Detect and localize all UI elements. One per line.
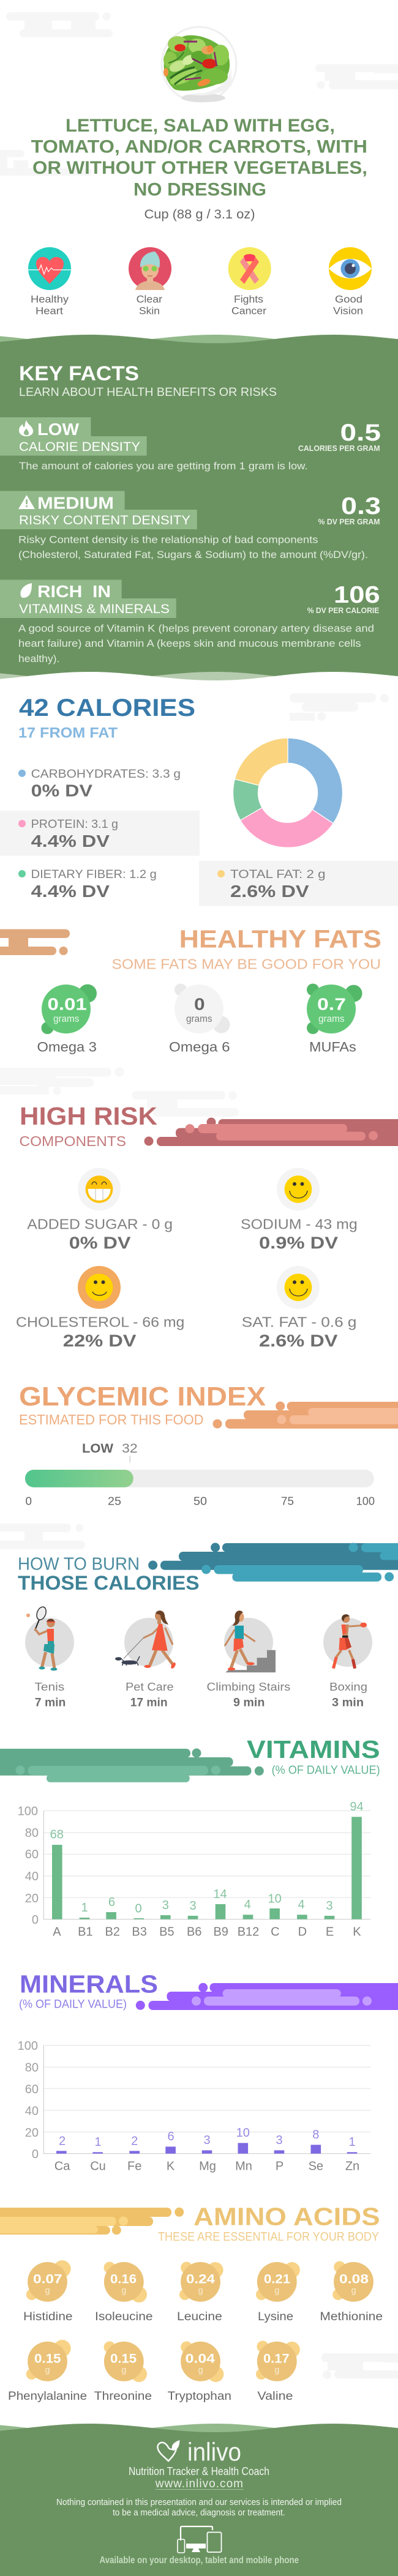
amino: methionine: Methionine bbox=[320, 2310, 383, 2323]
activity: pet care: 17 min bbox=[130, 1696, 168, 1710]
amino: isoleucine bbox=[95, 2261, 153, 2323]
fact: rich in vitamins and minerals: % DV PER CALORIE bbox=[307, 606, 379, 615]
activity: climbing stairs bbox=[207, 1610, 290, 1710]
glycemic bar: 0 bbox=[26, 1495, 32, 1507]
calories heading: 17 FROM FAT bbox=[18, 725, 118, 742]
vitamins bar chart: 1 bbox=[81, 1901, 88, 1915]
panel: key facts bbox=[0, 335, 398, 688]
title: NO DRESSING bbox=[133, 180, 266, 199]
amino: lysine: 0.21 bbox=[264, 2272, 290, 2287]
vitamins bar chart: 20 bbox=[25, 1892, 39, 1905]
vitamins bar chart: 94 bbox=[350, 1800, 364, 1814]
vitamins bar chart: 14 bbox=[213, 1888, 227, 1901]
minerals bar chart: P bbox=[276, 2160, 283, 2173]
vitamins bar chart: 60 bbox=[25, 1848, 39, 1861]
vitamins bar chart: A bbox=[53, 1925, 61, 1938]
amino acids heading: THESE ARE ESSENTIAL FOR YOUR BODY bbox=[158, 2230, 379, 2244]
minerals bar chart: 0 bbox=[32, 2148, 39, 2161]
vitamins bar chart: 4 bbox=[244, 1898, 251, 1912]
minerals heading: MINERALS bbox=[20, 1970, 158, 1998]
vitamins bar chart: B1 bbox=[78, 1925, 93, 1938]
healthy fats header decoration bbox=[0, 929, 70, 955]
key facts heading: KEY FACTS bbox=[19, 362, 139, 384]
fact: rich in vitamins and minerals: RICH IN bbox=[37, 582, 111, 601]
fat: omega 6 bbox=[169, 984, 230, 1055]
high risk heading: HIGH RISK bbox=[20, 1102, 157, 1130]
minerals bar chart: 6 bbox=[167, 2130, 175, 2143]
vitamins bar chart: 100 bbox=[18, 1805, 38, 1818]
fact: low calorie density bbox=[0, 417, 381, 472]
protein: PROTEIN: 3.1 g bbox=[31, 817, 118, 831]
amino: methionine: 0.08 bbox=[339, 2272, 369, 2287]
activity: boxing bbox=[323, 1614, 372, 1710]
carbohydrates bbox=[18, 767, 181, 800]
fact: rich in vitamins and minerals: A good source of Vitamin K (helps prevent coronary artery disease and bbox=[18, 623, 374, 634]
background clouds: high risk bbox=[0, 1067, 239, 1117]
amino: lysine bbox=[256, 2262, 300, 2323]
activity: pet care: Pet Care bbox=[126, 1680, 174, 1693]
amino: leucine bbox=[177, 2261, 223, 2323]
benefit: fights cancer: Fights bbox=[234, 294, 263, 305]
glycemic index heading: GLYCEMIC INDEX bbox=[19, 1382, 266, 1412]
minerals bar chart: Se bbox=[309, 2160, 323, 2173]
vitamins bar chart: 4 bbox=[298, 1898, 305, 1912]
vitamins bar chart: B2 bbox=[105, 1925, 120, 1938]
vitamins bar chart: D bbox=[298, 1925, 307, 1938]
minerals bar chart: 40 bbox=[25, 2105, 39, 2118]
high risk heading: COMPONENTS bbox=[20, 1133, 126, 1149]
vitamins bar chart bbox=[18, 1800, 370, 1938]
minerals bar chart bbox=[18, 2039, 370, 2173]
vitamins bar chart: B12 bbox=[238, 1925, 259, 1938]
glycemic bar: 50 bbox=[193, 1495, 207, 1507]
glycemic value marker: LOW bbox=[82, 1441, 114, 1456]
benefit: good vision: Vision bbox=[333, 305, 363, 317]
fact: medium risky content density: RISKY CONTENT DENSITY bbox=[19, 513, 190, 527]
fact: medium risky content density: % DV PER GRAM bbox=[318, 518, 380, 526]
vitamins heading bbox=[247, 1735, 380, 1777]
fact: low calorie density: LOW bbox=[37, 420, 79, 439]
amino: phenylalanine: g bbox=[45, 2366, 50, 2375]
activity: tennis bbox=[25, 1606, 74, 1710]
dietary fiber: DIETARY FIBER: 1.2 g bbox=[31, 868, 157, 881]
minerals bar chart: 2 bbox=[131, 2134, 138, 2148]
minerals bar chart: Mg bbox=[199, 2160, 216, 2173]
protein bbox=[18, 817, 118, 851]
dietary fiber bbox=[18, 868, 157, 901]
minerals header decoration bbox=[136, 1983, 398, 2010]
serving size: Cup (88 g / 3.1 oz) bbox=[145, 207, 255, 221]
activity: climbing stairs: Climbing Stairs bbox=[207, 1680, 290, 1693]
fat: omega 3: 0.01 bbox=[48, 995, 87, 1014]
benefit: clear skin: Skin bbox=[139, 305, 160, 317]
fact: low calorie density: 0.5 bbox=[340, 420, 381, 446]
healthy fats heading: HEALTHY FATS bbox=[179, 925, 381, 953]
amino: tryptophan: 0.04 bbox=[186, 2351, 215, 2366]
minerals bar chart: 1 bbox=[94, 2135, 102, 2149]
vitamins bar chart: C bbox=[271, 1925, 280, 1938]
vitamins header decoration bbox=[0, 1749, 264, 1782]
amino: lysine: Lysine bbox=[258, 2310, 293, 2323]
fact: medium risky content density: (Cholesterol, Saturated Fat, Sugars & Sodium) to the amount (%DV/gr). bbox=[18, 549, 368, 560]
vitamins bar chart: 0 bbox=[32, 1913, 39, 1927]
total fat bbox=[217, 868, 326, 901]
minerals bar chart: 8 bbox=[312, 2128, 319, 2142]
risk: added sugar bbox=[27, 1168, 173, 1253]
fat: mufas bbox=[307, 984, 362, 1055]
amino: leucine: g bbox=[198, 2286, 203, 2296]
amino: valine: g bbox=[274, 2366, 279, 2375]
risk: saturated fat: 2.6% DV bbox=[259, 1331, 338, 1350]
activity: tennis: 7 min bbox=[35, 1696, 66, 1710]
fat: omega 6: grams bbox=[186, 1014, 212, 1024]
amino: threonine: 0.15 bbox=[110, 2351, 137, 2366]
risk: sodium: 0.9% DV bbox=[259, 1234, 339, 1253]
fat: omega 6: Omega 6 bbox=[169, 1040, 230, 1055]
key facts heading bbox=[19, 362, 277, 399]
dietary fiber: 4.4% DV bbox=[31, 882, 110, 901]
risk: sodium bbox=[241, 1168, 358, 1253]
amino: isoleucine: g bbox=[121, 2286, 126, 2296]
background cloud: amino acids bbox=[321, 2353, 398, 2379]
healthy fats heading bbox=[111, 925, 381, 972]
benefit: healthy heart: Heart bbox=[36, 305, 63, 317]
protein: 4.4% DV bbox=[31, 832, 110, 851]
risk: cholesterol bbox=[16, 1266, 184, 1350]
minerals heading bbox=[19, 1970, 158, 2011]
vitamins bar chart: B5 bbox=[159, 1925, 175, 1938]
amino: histidine bbox=[23, 2260, 73, 2323]
fact: medium risky content density: Risky Content density is the relationship of bad components bbox=[18, 534, 318, 545]
activity: boxing: 3 min bbox=[332, 1696, 364, 1710]
fat: mufas: 0.7 bbox=[317, 995, 346, 1014]
minerals bar chart: 100 bbox=[18, 2039, 38, 2053]
amino: phenylalanine: Phenylalanine bbox=[8, 2390, 87, 2403]
minerals bar chart: Ca bbox=[54, 2160, 70, 2173]
fact: rich in vitamins and minerals: healthy). bbox=[18, 653, 59, 664]
inlivo logo bbox=[157, 2438, 241, 2466]
fat: mufas: grams bbox=[318, 1014, 345, 1024]
key facts heading: LEARN ABOUT HEALTH BENEFITS OR RISKS bbox=[19, 385, 277, 399]
burn heading: HOW TO BURN bbox=[18, 1555, 140, 1574]
minerals heading: (% OF DAILY VALUE) bbox=[19, 1998, 127, 2011]
minerals bar chart: 3 bbox=[276, 2134, 283, 2147]
amino acids heading: AMINO ACIDS bbox=[193, 2203, 380, 2231]
amino: isoleucine: Isoleucine bbox=[95, 2310, 153, 2323]
minerals bar chart: Fe bbox=[127, 2160, 141, 2173]
fact: low calorie density: The amount of calories you are getting from 1 gram is low. bbox=[19, 461, 307, 472]
vitamins bar chart: K bbox=[353, 1925, 361, 1938]
glycemic header decoration bbox=[213, 1401, 398, 1429]
vitamins bar chart: B3 bbox=[132, 1925, 147, 1938]
activity: tennis: Tenis bbox=[34, 1680, 64, 1693]
title: LETTUCE, SALAD WITH EGG, bbox=[66, 116, 335, 136]
fat: omega 3: Omega 3 bbox=[37, 1040, 97, 1055]
vitamins bar chart: B9 bbox=[213, 1925, 228, 1938]
tagline: Nutrition Tracker & Health Coach bbox=[129, 2465, 269, 2477]
minerals bar chart: Mn bbox=[235, 2160, 252, 2173]
carbohydrates: CARBOHYDRATES: 3.3 g bbox=[31, 767, 181, 781]
amino: valine: Valine bbox=[257, 2390, 293, 2403]
minerals bar chart: 10 bbox=[236, 2126, 250, 2140]
glycemic index heading bbox=[19, 1382, 266, 1428]
total fat: TOTAL FAT: 2 g bbox=[230, 868, 326, 881]
title: TOMATO, AND/OR CARROTS, WITH bbox=[31, 137, 367, 157]
amino: histidine: g bbox=[45, 2286, 50, 2296]
amino: leucine: 0.24 bbox=[186, 2272, 215, 2287]
salad illustration bbox=[162, 27, 236, 102]
donut chart bbox=[233, 738, 342, 847]
vitamins bar chart: 6 bbox=[108, 1896, 115, 1909]
fact: low calorie density: CALORIE DENSITY bbox=[19, 440, 140, 454]
disclaimer: Nothing contained in this presentation and our services is intended or implied bbox=[56, 2497, 342, 2507]
minerals bar chart: 60 bbox=[25, 2083, 39, 2096]
fat: omega 6: 0 bbox=[194, 995, 205, 1014]
fact: rich in vitamins and minerals: heart failure) and Vitamin A (keeps skin and mucous membrane cells bbox=[18, 638, 361, 649]
minerals bar chart: Zn bbox=[345, 2160, 359, 2173]
amino: valine: 0.17 bbox=[263, 2351, 290, 2366]
fact: rich in vitamins and minerals: 106 bbox=[334, 582, 380, 608]
vitamins bar chart: E bbox=[326, 1925, 334, 1938]
fat: omega 3 bbox=[37, 985, 97, 1055]
fact: medium risky content density: MEDIUM bbox=[37, 493, 114, 513]
glycemic bar: 75 bbox=[281, 1495, 294, 1507]
benefit: healthy heart bbox=[28, 247, 71, 317]
amino: lysine: g bbox=[274, 2286, 279, 2296]
amino: tryptophan bbox=[168, 2341, 231, 2403]
glycemic bar: 25 bbox=[108, 1495, 121, 1507]
fact: rich in vitamins and minerals bbox=[0, 580, 380, 664]
benefit: fights cancer bbox=[228, 247, 271, 317]
minerals bar chart: 20 bbox=[25, 2126, 39, 2140]
background cloud: calories bbox=[290, 693, 389, 721]
fact: medium risky content density: 0.3 bbox=[341, 493, 381, 519]
minerals bar chart: 2 bbox=[59, 2134, 66, 2148]
risk: saturated fat: SAT. FAT - 0.6 g bbox=[242, 1314, 356, 1330]
benefit: healthy heart: Healthy bbox=[31, 294, 69, 305]
vitamins heading: (% OF DAILY VALUE) bbox=[272, 1764, 380, 1777]
fact: low calorie density: CALORIES PER GRAM bbox=[298, 444, 380, 453]
vitamins bar chart: 80 bbox=[25, 1826, 39, 1840]
benefit: good vision: Good bbox=[335, 294, 362, 305]
burn heading bbox=[18, 1555, 200, 1594]
healthy fats heading: SOME FATS MAY BE GOOD FOR YOU bbox=[111, 956, 381, 972]
calories heading bbox=[18, 694, 195, 742]
amino: histidine: Histidine bbox=[23, 2310, 73, 2323]
amino acids heading bbox=[158, 2203, 380, 2244]
glycemic value marker bbox=[82, 1441, 138, 1462]
risk: sodium: SODIUM - 43 mg bbox=[241, 1216, 358, 1232]
benefit: good vision bbox=[329, 247, 372, 317]
minerals bar chart: Cu bbox=[90, 2160, 106, 2173]
amino: tryptophan: Tryptophan bbox=[168, 2390, 231, 2403]
glycemic index heading: ESTIMATED FOR THIS FOOD bbox=[19, 1412, 203, 1428]
devices icon bbox=[178, 2526, 222, 2553]
fat: omega 3: grams bbox=[53, 1014, 80, 1024]
amino: methionine bbox=[320, 2261, 383, 2323]
fact: rich in vitamins and minerals: VITAMINS & MINERALS bbox=[19, 602, 170, 616]
title bbox=[31, 116, 367, 199]
availability note: Available on your desktop, tablet and mobile phone bbox=[99, 2555, 299, 2566]
amino: phenylalanine bbox=[8, 2340, 87, 2403]
website link: www.inlivo.com bbox=[155, 2477, 243, 2490]
vitamins bar chart: 3 bbox=[326, 1899, 333, 1913]
risk: saturated fat bbox=[242, 1266, 356, 1350]
minerals bar chart: 3 bbox=[203, 2134, 211, 2147]
background clouds: header bbox=[0, 12, 398, 176]
vitamins bar chart: 3 bbox=[189, 1899, 197, 1913]
amino: isoleucine: 0.16 bbox=[110, 2272, 137, 2287]
vitamins bar chart: 68 bbox=[50, 1828, 64, 1841]
vitamins heading: VITAMINS bbox=[247, 1735, 380, 1763]
amino: valine bbox=[256, 2341, 300, 2403]
fat: mufas: MUFAs bbox=[309, 1040, 356, 1055]
footer panel bbox=[0, 2424, 398, 2576]
amino: methionine: g bbox=[351, 2286, 356, 2296]
amino: threonine bbox=[94, 2341, 152, 2403]
glycemic value marker: 32 bbox=[122, 1441, 138, 1456]
minerals bar chart: 1 bbox=[348, 2135, 356, 2149]
burn heading: THOSE CALORIES bbox=[18, 1572, 200, 1594]
risk: cholesterol: CHOLESTEROL - 66 mg bbox=[16, 1314, 184, 1330]
amino: leucine: Leucine bbox=[177, 2310, 222, 2323]
calories heading: 42 CALORIES bbox=[19, 694, 195, 721]
glycemic bar: 100 bbox=[356, 1495, 375, 1507]
vitamins bar chart: 3 bbox=[162, 1899, 169, 1912]
high risk header decoration bbox=[145, 1117, 398, 1146]
amino: tryptophan: g bbox=[198, 2366, 203, 2375]
carbohydrates: 0% DV bbox=[31, 781, 93, 800]
burn header decoration bbox=[148, 1543, 398, 1582]
vitamins bar chart: 10 bbox=[268, 1892, 282, 1905]
disclaimer: to be a medical advice, diagnosis or treatment. bbox=[113, 2507, 285, 2518]
benefit: fights cancer: Cancer bbox=[231, 305, 266, 317]
risk: cholesterol: 22% DV bbox=[63, 1331, 137, 1350]
activity: climbing stairs: 9 min bbox=[233, 1696, 265, 1710]
disclaimer bbox=[56, 2497, 342, 2518]
fact: medium risky content density bbox=[0, 491, 381, 560]
activity: pet care bbox=[115, 1610, 176, 1710]
high risk heading bbox=[20, 1102, 157, 1149]
macronutrient rows bbox=[0, 767, 398, 906]
activity: boxing: Boxing bbox=[329, 1680, 367, 1693]
risk: added sugar: 0% DV bbox=[69, 1234, 131, 1253]
total fat: 2.6% DV bbox=[230, 882, 309, 901]
amino: threonine: Threonine bbox=[94, 2390, 152, 2403]
background cloud: burn bbox=[0, 1524, 85, 1549]
inlivo logo: inlivo bbox=[187, 2438, 241, 2466]
benefit: clear skin: Clear bbox=[137, 294, 162, 305]
risk: added sugar: ADDED SUGAR - 0 g bbox=[27, 1216, 173, 1232]
amino: threonine: g bbox=[121, 2366, 126, 2375]
title: OR WITHOUT OTHER VEGETABLES, bbox=[32, 158, 367, 178]
minerals bar chart: 80 bbox=[25, 2061, 39, 2075]
benefit: clear skin bbox=[129, 247, 171, 317]
vitamins bar chart: 40 bbox=[25, 1870, 39, 1883]
glycemic bar bbox=[25, 1470, 375, 1507]
amino: histidine: 0.07 bbox=[33, 2272, 62, 2287]
vitamins bar chart: 0 bbox=[135, 1902, 142, 1916]
amino: phenylalanine: 0.15 bbox=[34, 2351, 61, 2366]
amino acids header decoration bbox=[0, 2208, 184, 2235]
vitamins bar chart: B6 bbox=[187, 1925, 201, 1938]
minerals bar chart: K bbox=[167, 2160, 175, 2173]
